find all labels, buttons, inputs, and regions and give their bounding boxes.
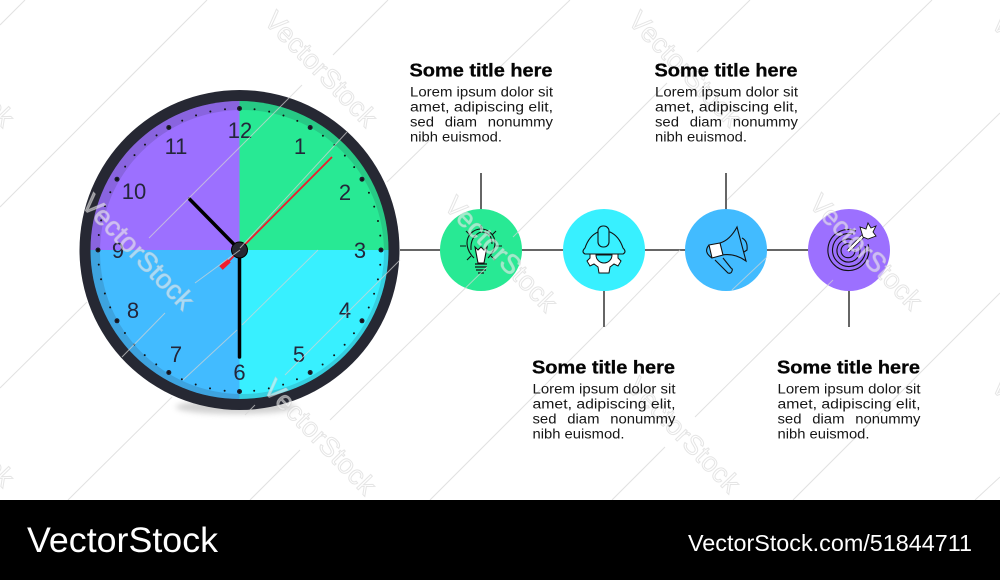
hour hand: [190, 199, 240, 250]
node 3: megaphone: [685, 209, 767, 291]
connector lines: [400, 173, 849, 327]
node 1: lightbulb: [440, 209, 522, 291]
watermarks: VectorStock: [258, 373, 382, 501]
text block 4: Some title here: [777, 356, 920, 378]
clock numbers: 5: [293, 342, 305, 367]
minute hand: [238, 250, 241, 357]
text block 4: nibh euismod.: [778, 426, 870, 442]
clock numbers: 9: [112, 238, 124, 263]
clock numbers: 3: [354, 238, 366, 263]
clock numbers: 7: [170, 342, 182, 367]
clock face: purple quadrant: [90, 101, 240, 250]
text block 2: sed diam nonummy: [655, 114, 798, 130]
text block 4: sed diam nonummy: [778, 412, 921, 426]
clock numbers: 4: [339, 298, 351, 323]
watermarks: VectorStock: [76, 188, 200, 316]
inner rim shade: [90, 101, 388, 399]
watermarks: VectorStock: [439, 190, 563, 318]
text block 1: [410, 60, 553, 144]
text block 2: Lorem ipsum dolor sit: [655, 84, 798, 100]
clock face: blue quadrant: [90, 250, 240, 399]
text block 2: [654, 60, 798, 144]
node 2: helmet and gear: [563, 209, 645, 291]
watermarks: VectorStock: [623, 5, 747, 133]
text block 1: Some title here: [410, 60, 552, 80]
clock numbers: 8: [127, 298, 139, 323]
text block 4: [777, 356, 921, 442]
text block 3: Lorem ipsum dolor sit: [532, 382, 676, 396]
text block 4: Lorem ipsum dolor sit: [778, 382, 921, 396]
clock face: cyan quadrant: [240, 250, 388, 399]
text block 3: [532, 356, 676, 442]
text block 2: Some title here: [654, 60, 798, 80]
watermarks: VectorStock: [622, 371, 746, 499]
text block 1: nibh euismod.: [410, 130, 502, 144]
hour ticks: [96, 106, 384, 394]
second hand: [221, 157, 332, 268]
text block 2: nibh euismod.: [655, 130, 747, 144]
text block 1: Lorem ipsum dolor sit: [410, 84, 553, 100]
minute ticks: [98, 108, 381, 392]
text block 2: amet, adipiscing elit,: [655, 100, 798, 114]
clock: [80, 90, 400, 410]
text block 1: amet, adipiscing elit,: [410, 100, 553, 114]
clock numbers: 2: [339, 180, 351, 205]
clock numbers: 11: [165, 134, 187, 159]
clock numbers: [112, 118, 366, 385]
node 4: target with arrow: [808, 209, 890, 291]
text block 1: sed diam nonummy: [410, 114, 553, 130]
clock face: green quadrant: [240, 101, 388, 250]
text block 3: nibh euismod.: [532, 426, 624, 442]
clock numbers: 10: [122, 179, 146, 204]
watermarks: VectorStock: [804, 188, 928, 316]
footer logo: VectorStock: [27, 521, 219, 560]
clock numbers: 1: [294, 134, 306, 159]
clock numbers: 12: [228, 118, 252, 143]
text block 3: Some title here: [532, 356, 675, 378]
text block 4: amet, adipiscing elit,: [778, 396, 920, 412]
clock numbers: 6: [233, 360, 246, 385]
text block 3: amet, adipiscing elit,: [532, 396, 676, 412]
clock shadow: [176, 400, 296, 414]
footer url: VectorStock.com/51844711: [688, 530, 972, 556]
text block 3: sed diam nonummy: [532, 412, 676, 426]
clock hub: [232, 242, 248, 258]
watermarks: VectorStock: [259, 5, 383, 133]
footer bar: [0, 500, 1000, 580]
